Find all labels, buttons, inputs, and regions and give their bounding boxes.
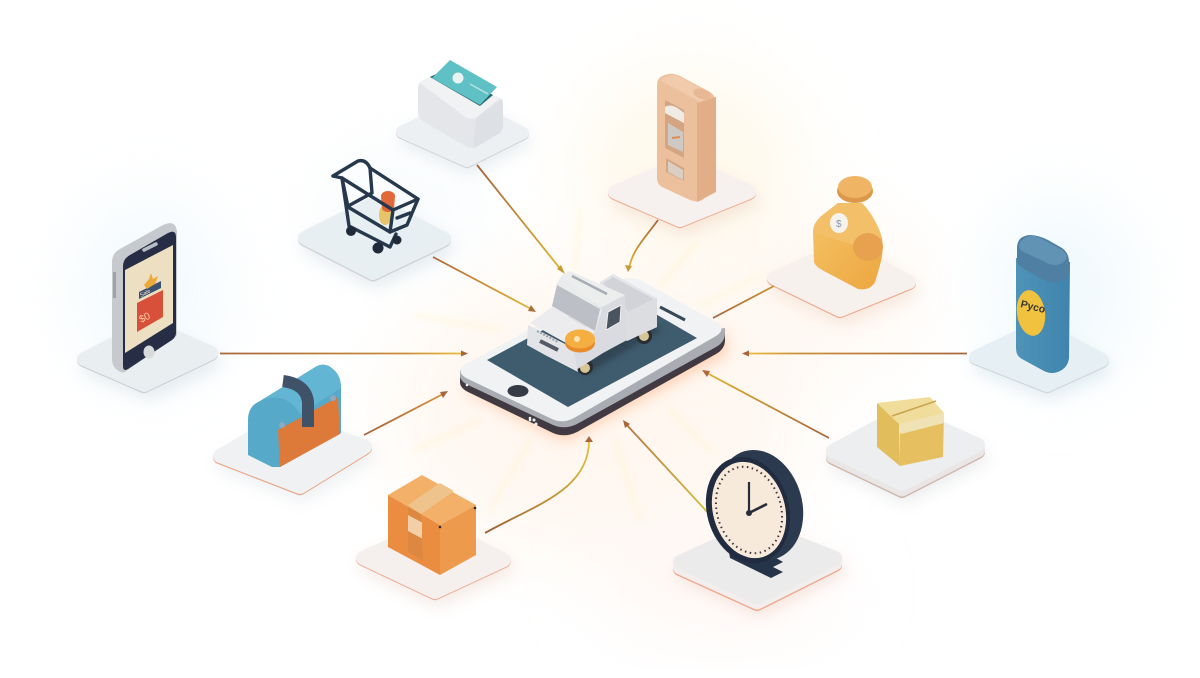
- platform: clock: [680, 527, 838, 608]
- arrow: blue bottle to hub: [742, 350, 967, 356]
- icon: smartphone with promo: $0: [137, 311, 153, 326]
- platform: shopping cart: [305, 203, 447, 281]
- hub speaker: [660, 307, 685, 320]
- arrow: kiosk to hub: [625, 220, 658, 272]
- platform: phone: [84, 326, 215, 393]
- platform: yellow box: [833, 412, 981, 496]
- arrow: cart to hub: [433, 257, 536, 312]
- icon: card terminal: [418, 60, 503, 148]
- hub phone face: [460, 278, 722, 421]
- hub phone edge: [460, 330, 725, 435]
- platform: toolbox: [220, 418, 368, 494]
- icon: smartphone with promo: [112, 223, 177, 372]
- platform: tan kiosk: [615, 162, 752, 228]
- truck shadow: [540, 312, 662, 375]
- truck orange coin: [565, 330, 595, 352]
- connector: orange bottle to hub: [713, 286, 774, 318]
- radial light rays: [415, 210, 760, 520]
- icon: orange parcel: [388, 475, 476, 575]
- icon: orange bottle: [813, 176, 883, 289]
- truck cab: [562, 271, 625, 310]
- platform: orange bottle: [774, 247, 912, 318]
- hub ports: [466, 384, 538, 426]
- arrow: terminal to hub: [477, 165, 565, 274]
- platform: blue bottle: [976, 327, 1105, 393]
- arrow: toolbox to hub: [364, 391, 448, 435]
- hub home button: [508, 385, 528, 397]
- arrow: phone to hub: [220, 350, 468, 356]
- truck bed: [600, 274, 657, 341]
- icon: blue and orange toolbox: [248, 365, 341, 467]
- central hub: phone with delivery truck: [460, 271, 728, 440]
- icon: blue bottle with label: [1014, 235, 1070, 373]
- icon: tan kiosk tower: [657, 74, 716, 202]
- icon: smartphone with promo: Sale: [139, 289, 152, 299]
- arrow: clock to hub: [623, 420, 711, 516]
- truck wheels: [577, 328, 652, 375]
- icon: wall clock on stand: [694, 440, 816, 578]
- arrow: yellow box to hub: [702, 370, 829, 438]
- icon: shopping cart: [333, 161, 418, 254]
- icon: yellow parcel: [877, 397, 944, 466]
- arrow: orange box to hub: [485, 436, 593, 533]
- hub phone screen: [487, 291, 697, 407]
- icon: blue bottle with label: Pyco: [1019, 298, 1047, 316]
- platform: payment terminal: [402, 102, 526, 168]
- icon: orange bottle: $: [836, 219, 842, 230]
- platform: orange box: [363, 525, 507, 600]
- hub glow: [462, 330, 728, 440]
